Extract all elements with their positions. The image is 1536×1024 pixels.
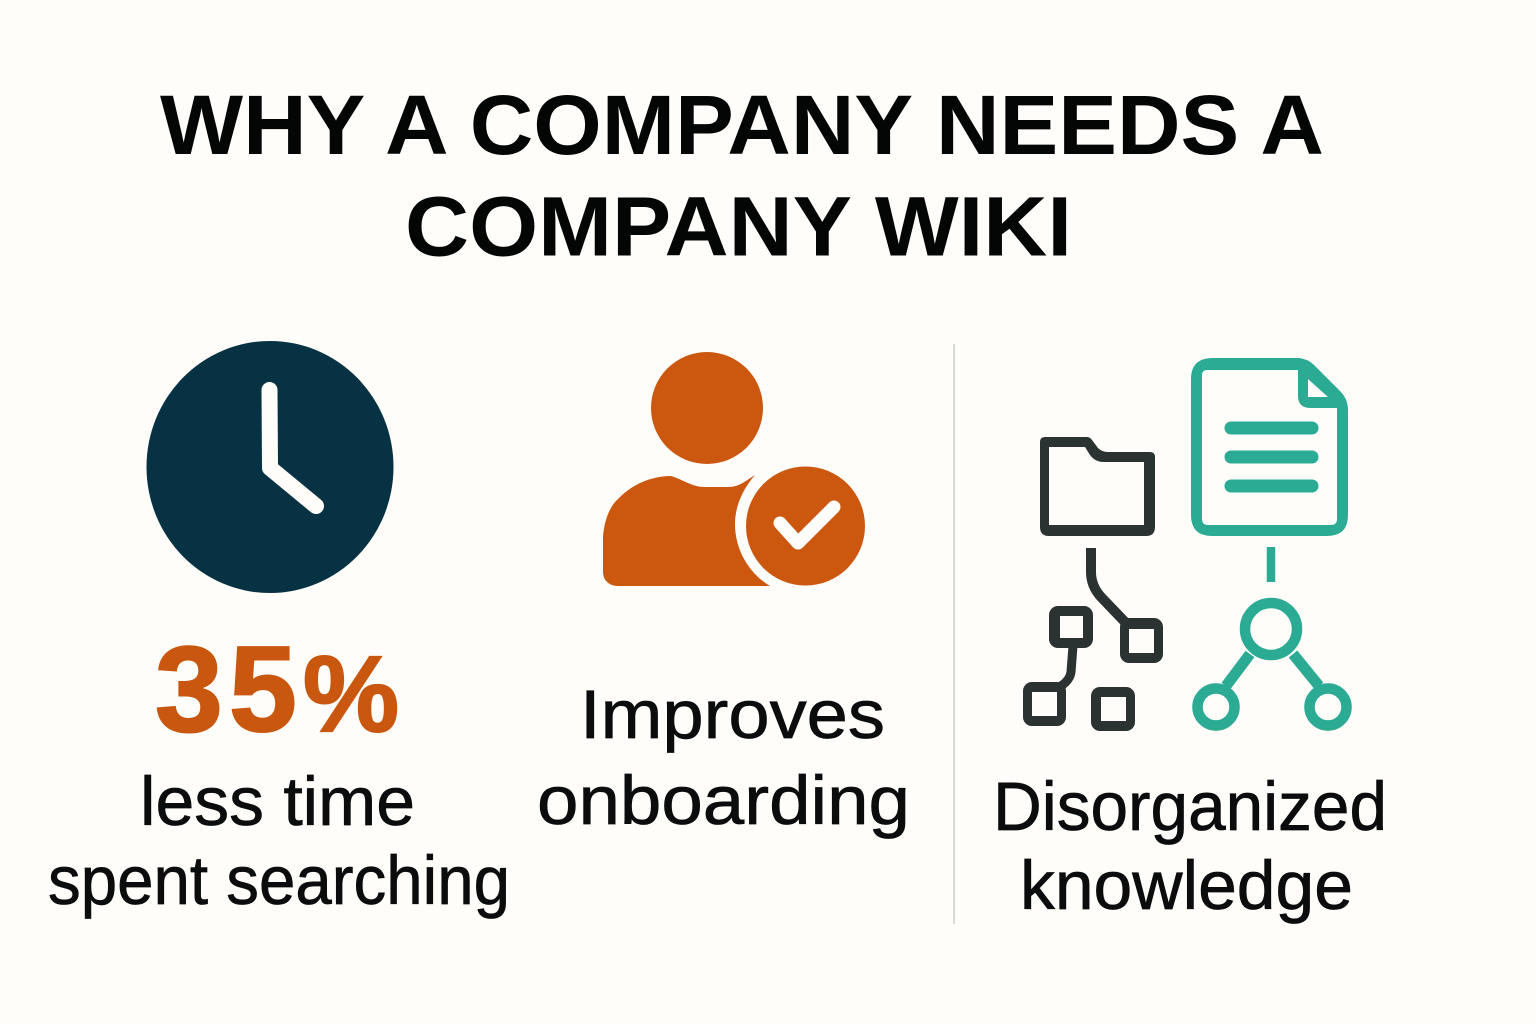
- icon: clock: [146, 341, 394, 593]
- caption: improves onboarding: Improves: [580, 676, 885, 753]
- caption: less time spent searching: spent searching: [48, 842, 510, 919]
- caption: improves onboarding: [537, 676, 910, 839]
- caption: less time spent searching: less time: [140, 763, 415, 840]
- icon: person with check badge: [603, 352, 865, 586]
- caption: disorganized knowledge: [993, 768, 1387, 924]
- panel: time saved: [48, 341, 510, 919]
- caption: improves onboarding: onboarding: [537, 762, 910, 839]
- caption: disorganized knowledge: Disorganized: [993, 768, 1387, 845]
- title: WHY A COMPANY NEEDS A: [160, 78, 1324, 172]
- icon: folder: [1040, 437, 1155, 536]
- icon: scattered tree nodes: [1023, 548, 1163, 731]
- icon: connected hub: [1198, 547, 1346, 726]
- title: COMPANY WIKI: [405, 180, 1072, 274]
- title: [160, 78, 1324, 274]
- caption: less time spent searching: [48, 763, 510, 919]
- stat: 35%: 35%: [155, 621, 399, 757]
- panel: onboarding: [537, 352, 910, 839]
- caption: disorganized knowledge: knowledge: [1020, 847, 1353, 924]
- panel: disorganized knowledge: [993, 358, 1387, 924]
- icon: document: [1191, 358, 1348, 536]
- divider: [953, 344, 955, 924]
